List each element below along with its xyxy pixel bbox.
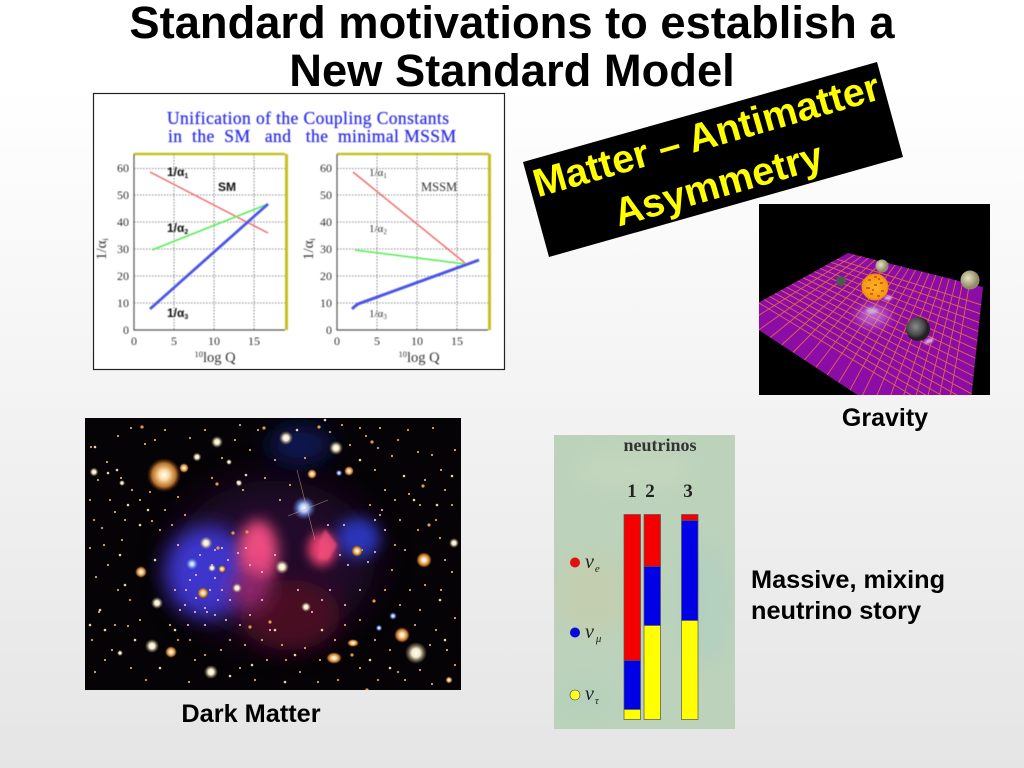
chart: SM: 3 bbox=[184, 314, 188, 321]
caption: neutrino story bbox=[751, 566, 945, 625]
legend: ν bbox=[585, 551, 594, 573]
caption: neutrino story: neutrino story bbox=[751, 597, 921, 625]
chart: SM: 1 bbox=[184, 173, 188, 180]
caption: gravity: Gravity bbox=[842, 404, 928, 432]
panel: coupling constants unification chart bbox=[94, 94, 504, 370]
legend: τ bbox=[595, 695, 600, 707]
chart: MSSM: 1/α bbox=[369, 308, 383, 320]
chart title: in the SM and the minimal MSSM bbox=[168, 126, 456, 146]
chart: SM: 15 bbox=[248, 334, 260, 348]
chart: MSSM: 50 bbox=[320, 188, 332, 202]
chart: MSSM: 1/α bbox=[369, 223, 383, 235]
chart: SM: 10 bbox=[208, 334, 220, 348]
callout: matter-antimatter banner: Matter – Antimatter bbox=[528, 65, 885, 206]
bar labels: 3 bbox=[683, 481, 693, 502]
curve: 1/alpha3 MSSM bbox=[352, 260, 479, 309]
chart: SM: 20 bbox=[117, 269, 129, 283]
chart: SM: 0 bbox=[131, 334, 137, 348]
panel: neutrinos chart bbox=[554, 435, 735, 729]
chart: MSSM: 30 bbox=[320, 242, 332, 256]
curve: 1/alpha1 MSSM bbox=[353, 172, 465, 263]
bar labels bbox=[627, 481, 693, 502]
chart: SM: 1/α bbox=[167, 306, 184, 320]
panel: gravity image bbox=[759, 204, 990, 395]
chart title: Unification of the Coupling Constants bbox=[167, 108, 449, 128]
callout: matter-antimatter banner bbox=[523, 62, 903, 257]
chart: MSSM: 1/α bbox=[369, 167, 383, 179]
curve: 1/alpha2 SM bbox=[152, 204, 268, 250]
heading: neutrinos: neutrinos bbox=[623, 435, 697, 455]
chart: SM: 2 bbox=[184, 229, 188, 236]
chart: MSSM bbox=[301, 154, 491, 366]
chart: MSSM: 1 bbox=[383, 172, 387, 180]
chart: SM: 10 bbox=[117, 296, 129, 310]
chart: MSSM: 0 bbox=[326, 323, 332, 337]
chart: MSSM: 5 bbox=[374, 334, 380, 348]
chart: SM: 50 bbox=[117, 188, 129, 202]
icon: dark planet bbox=[906, 317, 930, 341]
chart: MSSM: 40 bbox=[320, 215, 332, 229]
chart: MSSM: MSSM bbox=[421, 180, 457, 194]
bar 1 bbox=[624, 514, 640, 720]
chart: MSSM: 0 bbox=[334, 334, 340, 348]
small galaxies bbox=[90, 425, 455, 684]
chart: SM: 5 bbox=[171, 334, 177, 348]
bar labels: 2 bbox=[645, 481, 655, 502]
icon: pale planet right bbox=[960, 270, 980, 290]
title: New Standard Model bbox=[289, 45, 735, 96]
chart: MSSM: i bbox=[308, 237, 317, 240]
icon: small dark planet bbox=[836, 276, 846, 286]
legend: e bbox=[595, 563, 600, 575]
chart title bbox=[167, 108, 456, 146]
bar 2 bbox=[644, 514, 660, 720]
legend: μ bbox=[595, 633, 602, 645]
chart: MSSM: log Q bbox=[407, 350, 440, 366]
chart: MSSM: 3 bbox=[383, 313, 387, 321]
caption: dark matter: Dark Matter bbox=[181, 700, 321, 728]
title bbox=[129, 0, 895, 96]
caption: neutrino story: Massive, mixing bbox=[751, 566, 945, 594]
chart: SM: 1/α bbox=[167, 221, 184, 235]
chart: SM bbox=[94, 154, 288, 366]
chart: SM: i bbox=[101, 237, 110, 240]
chart: SM: 1/α bbox=[94, 240, 110, 260]
chart: MSSM: 2 bbox=[383, 228, 387, 236]
chart: SM: 60 bbox=[117, 161, 129, 175]
chart: MSSM: 1/α bbox=[301, 240, 317, 260]
callout: matter-antimatter banner: Asymmetry bbox=[609, 134, 828, 235]
legend: ν bbox=[585, 683, 594, 705]
bright stars bbox=[90, 431, 459, 684]
chart: SM: 1/α bbox=[167, 165, 184, 179]
chart: SM: 30 bbox=[117, 242, 129, 256]
bar labels: 1 bbox=[627, 481, 637, 502]
chart: MSSM: 10 bbox=[398, 349, 407, 359]
chart: MSSM: 15 bbox=[451, 334, 463, 348]
chart: SM: log Q bbox=[203, 350, 236, 366]
legend: ν bbox=[585, 621, 594, 643]
chart: MSSM: 10 bbox=[411, 334, 423, 348]
chart: SM: 40 bbox=[117, 215, 129, 229]
icon: sun bbox=[862, 274, 888, 300]
chart: SM: 0 bbox=[123, 323, 129, 337]
curve: 1/alpha1 SM bbox=[150, 172, 268, 233]
chart: MSSM: 60 bbox=[320, 161, 332, 175]
icon: pale planet top bbox=[876, 260, 888, 272]
legend bbox=[570, 551, 602, 707]
chart: SM: SM bbox=[218, 180, 236, 194]
chart: MSSM: 20 bbox=[320, 269, 332, 283]
bar 3 bbox=[682, 514, 698, 720]
curve: 1/alpha2 MSSM bbox=[355, 250, 465, 264]
chart: SM: 10 bbox=[194, 349, 203, 359]
panel: dark matter image bbox=[85, 418, 461, 690]
curve: 1/alpha3 SM bbox=[150, 204, 268, 309]
chart: MSSM: 10 bbox=[320, 296, 332, 310]
